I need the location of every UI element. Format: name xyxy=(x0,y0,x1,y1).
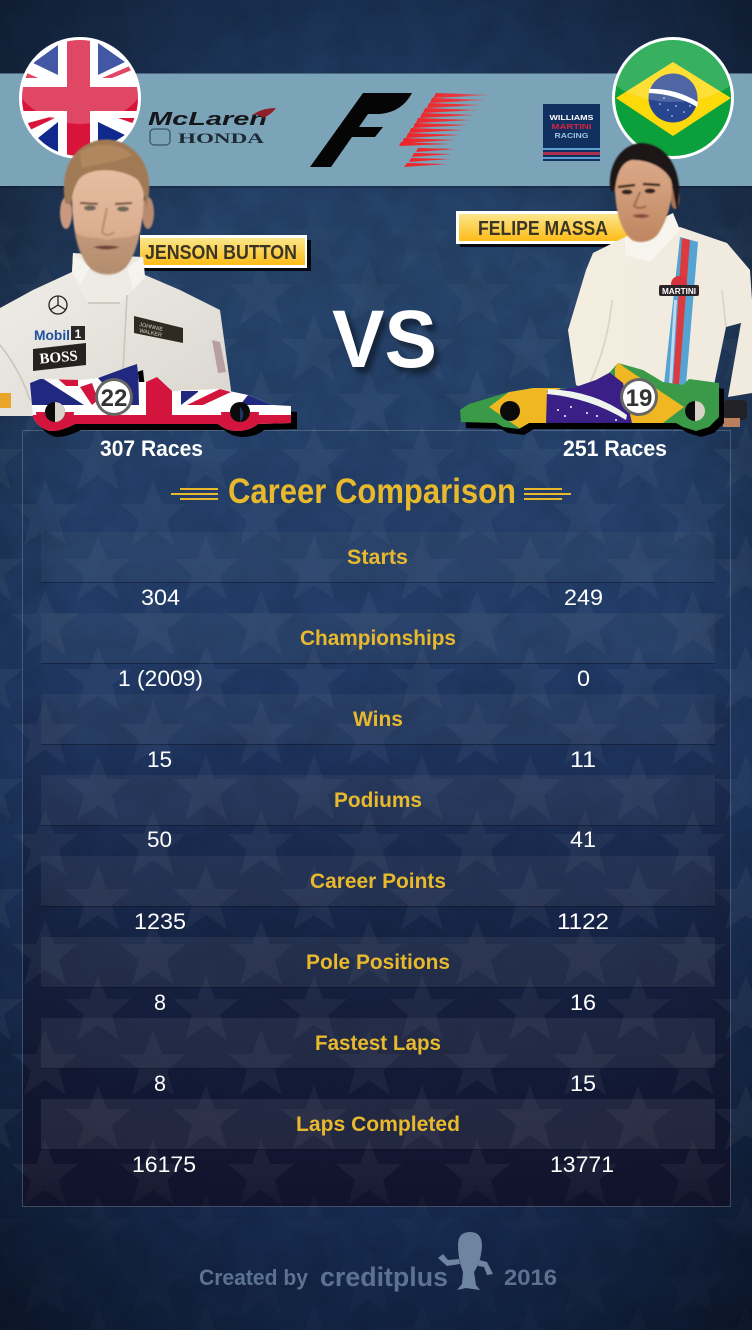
logo: McLaren Honda: McLaren xyxy=(148,109,267,129)
logo: Williams Martini Racing xyxy=(543,104,600,161)
row: Pole Positions: 16 xyxy=(570,990,596,1015)
footer credit xyxy=(199,1232,557,1292)
row: Laps Completed: 13771 xyxy=(550,1152,614,1177)
text: Button races: 307 Races xyxy=(100,436,203,461)
icon: mascot xyxy=(438,1232,493,1290)
number badge 19: 19 xyxy=(626,385,652,412)
logo: F1 xyxy=(310,93,493,167)
logo: Mobil 1 xyxy=(34,326,85,343)
logo: McLaren Honda xyxy=(148,108,276,147)
footer credit: Created by xyxy=(199,1265,309,1290)
row: Laps Completed: 16175 xyxy=(132,1152,196,1177)
row: Fastest Laps xyxy=(41,1018,715,1096)
row: Career Points: Career Points xyxy=(310,870,446,893)
row: Championships: 1 (2009) xyxy=(118,666,203,691)
number badge 22: 22 xyxy=(101,385,127,412)
text: Massa races: 251 Races xyxy=(563,436,667,461)
logo: Johnnie Walker: WALKER xyxy=(139,328,162,339)
footer credit: creditplus xyxy=(320,1262,448,1292)
row: Podiums: 50 xyxy=(147,827,172,852)
row: Podiums: Podiums xyxy=(334,789,422,812)
row: Starts: Starts xyxy=(347,546,408,569)
label: Felipe Massa xyxy=(456,211,632,247)
row: Wins xyxy=(41,694,715,772)
logo: Johnnie Walker xyxy=(134,316,183,343)
icon: Button car xyxy=(28,360,297,437)
row: Pole Positions: Pole Positions xyxy=(306,951,450,974)
row: Career Points xyxy=(41,856,715,934)
icon: Massa car xyxy=(455,360,725,437)
row: Starts: 249 xyxy=(564,585,603,610)
VS title: VS xyxy=(337,300,442,391)
portrait: Felipe Massa xyxy=(568,143,752,427)
panel: career comparison background xyxy=(22,430,730,1206)
logo: Williams Martini Racing: MARTINI xyxy=(552,122,592,131)
star pattern xyxy=(0,448,752,1186)
logo: Martini xyxy=(659,276,699,296)
heading: Career Comparison: Career Comparison xyxy=(228,472,516,511)
row: Fastest Laps: 8 xyxy=(154,1071,166,1096)
row: Wins: Wins xyxy=(353,708,403,731)
label: Jenson Button xyxy=(140,235,311,271)
logo: Martini: MARTINI xyxy=(662,287,696,296)
row: Fastest Laps: 15 xyxy=(570,1071,596,1096)
row: Pole Positions xyxy=(41,937,715,1015)
row: Pole Positions: 8 xyxy=(154,990,166,1015)
VS title: VS xyxy=(332,294,437,385)
row: Starts xyxy=(41,532,715,610)
row: Laps Completed: Laps Completed xyxy=(296,1113,460,1136)
row: Championships xyxy=(41,613,715,691)
logo: Williams Martini Racing: RACING xyxy=(554,131,589,140)
logo: Mobil 1: 1 xyxy=(75,327,82,341)
row: Podiums xyxy=(41,775,715,852)
icon: UK flag xyxy=(19,37,141,158)
row: Career Points: 1122 xyxy=(557,909,609,934)
footer credit: 2016 xyxy=(504,1265,557,1290)
label: Jenson Button: JENSON BUTTON xyxy=(145,242,297,264)
logo: Mercedes xyxy=(49,296,67,314)
logo: Boss xyxy=(33,343,86,371)
label: Felipe Massa: FELIPE MASSA xyxy=(478,218,608,240)
row: Career Points: 1235 xyxy=(134,909,186,934)
icon: Brazil flag xyxy=(612,37,734,159)
portrait: Jenson Button xyxy=(0,140,232,416)
row: Championships: 0 xyxy=(577,666,590,691)
number badge 22 xyxy=(95,378,133,416)
row: Starts: 304 xyxy=(141,585,180,610)
row: Laps Completed xyxy=(41,1099,715,1177)
header band xyxy=(0,73,752,188)
row: Podiums: 41 xyxy=(570,827,596,852)
row: Wins: 11 xyxy=(570,747,596,772)
number badge 19 xyxy=(620,378,658,416)
row: Championships: Championships xyxy=(300,627,456,650)
logo: Boss: BOSS xyxy=(39,348,78,368)
logo: Williams Martini Racing: WILLIAMS xyxy=(550,113,594,122)
logo: Mobil 1: Mobil xyxy=(34,327,70,343)
logo: Johnnie Walker: JOHNNIE xyxy=(139,322,164,333)
row: Fastest Laps: Fastest Laps xyxy=(315,1032,441,1055)
row: Wins: 15 xyxy=(147,747,172,772)
logo: McLaren Honda: HONDA xyxy=(178,131,265,147)
